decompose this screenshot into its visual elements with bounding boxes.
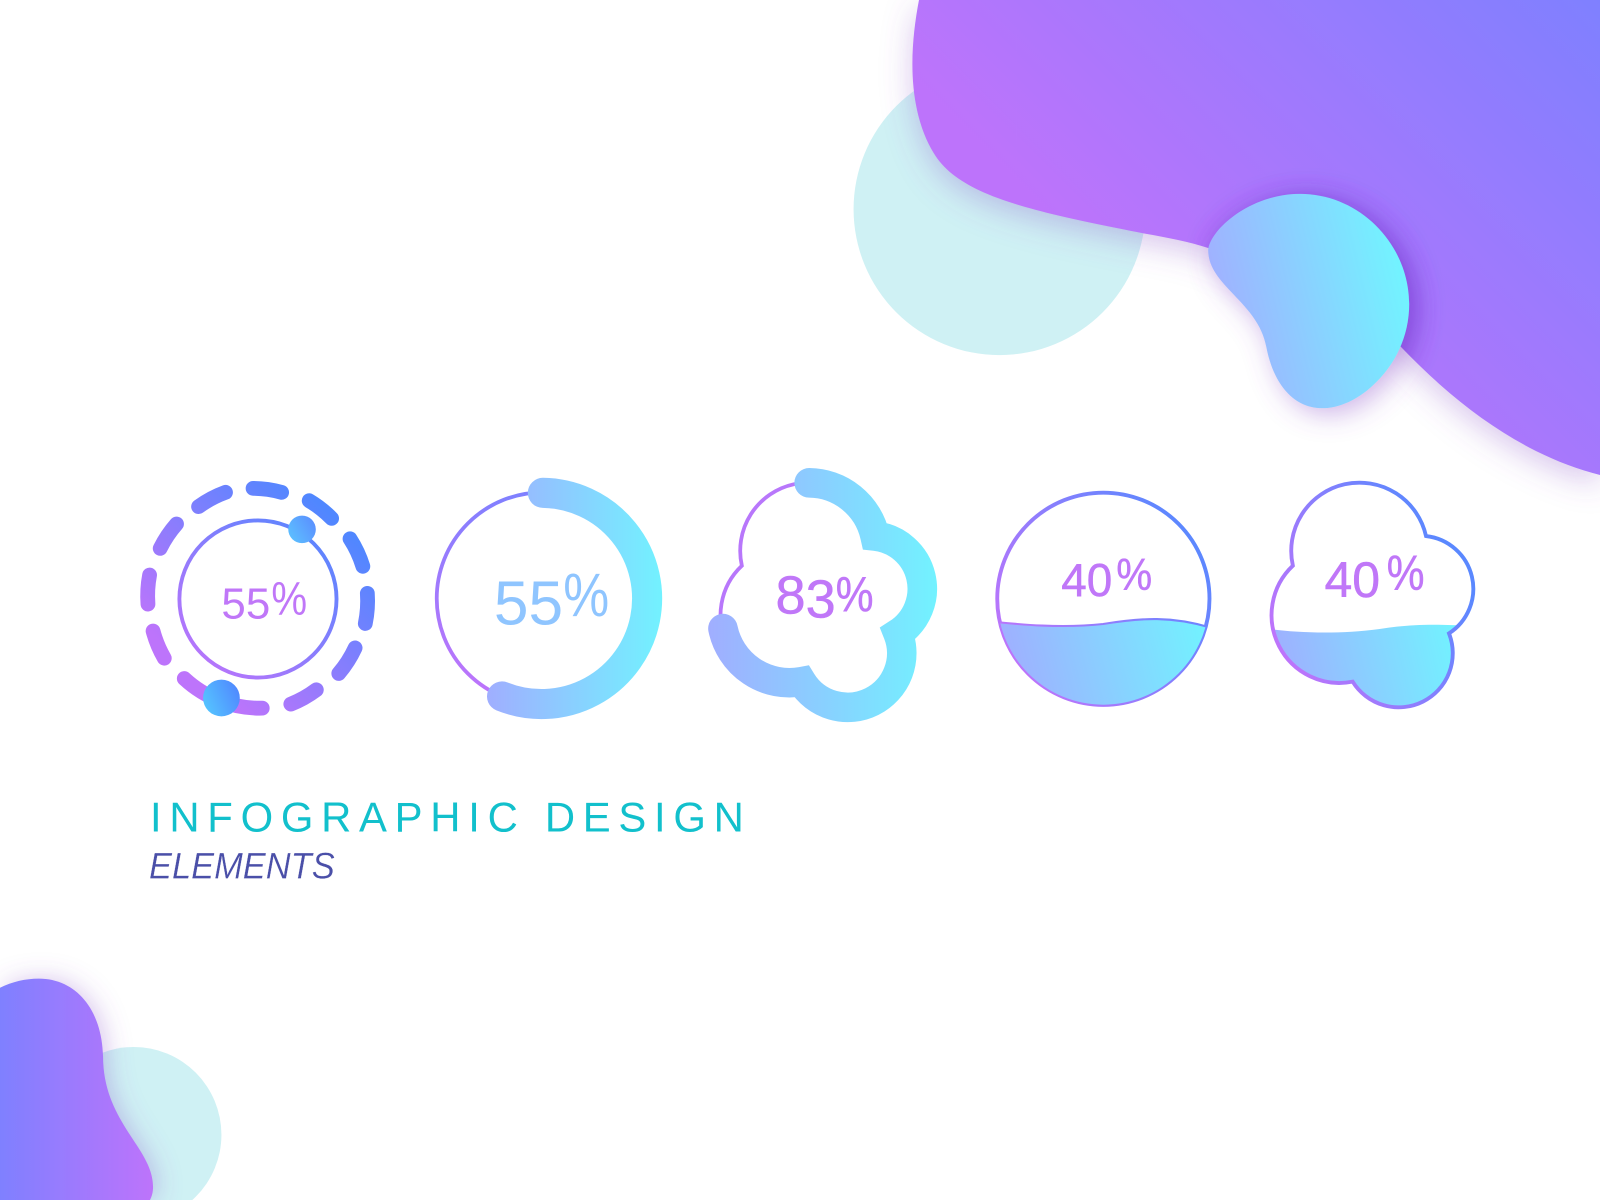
- bottom-left purple blob: [0, 979, 153, 1200]
- gauge 3: cloud outline with thick progress 83%: [721, 483, 922, 707]
- bottom-left pale teal circle: [46, 1047, 221, 1200]
- value 55%: %: [563, 561, 609, 629]
- value 40%: [1324, 546, 1424, 608]
- liquid fill: [1275, 624, 1456, 706]
- gauge 1: dashed ring 55%: [148, 488, 368, 716]
- gauge 5: liquid-fill cloud 40%: [1265, 483, 1480, 714]
- value 83%: [776, 565, 873, 629]
- liquid surface line: [1000, 618, 1206, 628]
- cloud outline: [1272, 483, 1473, 707]
- value 55%: [494, 561, 609, 638]
- top-right purple blob: [912, 0, 1600, 475]
- thin cloud track: [721, 483, 922, 707]
- inner thin ring: [179, 520, 337, 678]
- title: INFOGRAPHIC DESIGN: [150, 794, 744, 841]
- value 40%: 40: [1324, 552, 1380, 608]
- value 40%: 40: [1061, 554, 1112, 606]
- value 55%: 55: [221, 579, 270, 628]
- dashed outer ring: [148, 488, 368, 708]
- large knob: [203, 680, 240, 716]
- droplet shadow cast on the blob: [1214, 198, 1415, 412]
- small knob: [288, 516, 316, 543]
- gauge 4: liquid-fill circle 40%: [990, 493, 1219, 714]
- value 40%: %: [1387, 546, 1424, 600]
- value 55%: 55: [494, 569, 563, 638]
- thick progress arc: [502, 493, 647, 704]
- value 40%: [1061, 548, 1152, 606]
- value 40%: %: [1116, 548, 1152, 599]
- thick cloud progress: [723, 483, 922, 707]
- liquid fill: [1000, 620, 1206, 705]
- top-right cyan droplet: [1208, 194, 1409, 408]
- subtitle: ELEMENTS: [149, 846, 335, 887]
- thin track ring: [437, 492, 649, 705]
- value 83%: %: [836, 568, 873, 622]
- value 83%: 8: [776, 565, 806, 625]
- top-right pale teal circle: [854, 63, 1145, 355]
- circle outline: [997, 493, 1209, 705]
- value 83%: 3: [806, 569, 836, 629]
- gauge 2: thick arc ring 55%: [437, 492, 649, 705]
- value 55%: %: [271, 572, 307, 624]
- value 55%: [221, 572, 307, 628]
